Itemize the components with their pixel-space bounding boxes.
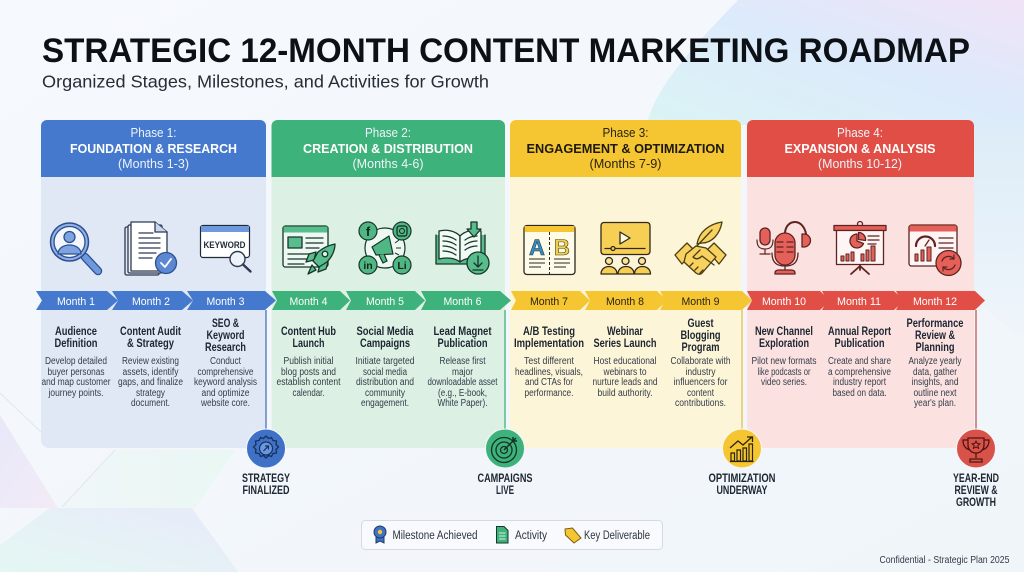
activity: month 7: headlines, visuals, (515, 367, 583, 378)
activity: month 9 (670, 316, 730, 409)
timeline: month chevrons: Month 7 (530, 296, 568, 308)
milestone: year-end review and growth: REVIEW & (954, 485, 998, 497)
panel: phase 1 (41, 120, 266, 448)
milestone: strategy finalized: STRATEGY (242, 473, 290, 485)
timeline: month chevrons: Month 5 (366, 296, 404, 308)
activity: month 8 (592, 324, 658, 399)
panel: phase 2: Phase 2: (365, 125, 411, 140)
activity: month 12 (906, 316, 964, 409)
activity: month 2: Review existing (122, 356, 179, 367)
icon: lead magnet book (436, 222, 489, 274)
icon: A/B test (524, 226, 575, 274)
activity: month 10: New Channel (755, 324, 813, 338)
activity: month 11: a comprehensive (828, 367, 891, 378)
activity: month 8: Webinar (607, 324, 643, 338)
timeline: month chevrons: Month 9 (682, 296, 720, 308)
panel: phase 3: ENGAGEMENT & OPTIMIZATION (526, 141, 724, 156)
activity: month 10: Exploration (759, 336, 809, 350)
activity: month 12: year's plan. (914, 398, 956, 409)
legend: Activity (515, 530, 547, 542)
icon: A/B test: B (554, 235, 570, 260)
milestone: year-end review and growth: YEAR-END (953, 473, 999, 485)
subtitle: Organized Stages, Milestones, and Activities for Growth (42, 72, 489, 92)
activity: month 5 (356, 324, 414, 409)
activity: month 11: industry report (833, 377, 886, 388)
panel: phase 4: Phase 4: (837, 125, 883, 140)
legend: Key Deliverable (584, 530, 650, 542)
timeline: month chevrons: Month 4 (290, 296, 328, 308)
activity: month 5: engagement. (361, 398, 409, 409)
activity: month 1: buyer personas (48, 367, 104, 378)
milestone: campaigns live: CAMPAIGNS (478, 473, 533, 485)
activity: month 7: performance. (524, 388, 574, 399)
timeline: month chevrons: Month 3 (206, 296, 244, 308)
activity: month 8: nurture leads and (592, 377, 658, 388)
activity: month 10: video series. (761, 377, 807, 388)
activity: month 6: Lead Magnet (434, 324, 492, 338)
activity: month 3: SEO & (212, 316, 239, 330)
activity: month 2: assets, identify (122, 367, 178, 378)
panel: phase 1: (Months 1-3) (118, 156, 189, 171)
activity: month 6: Release first (440, 356, 486, 367)
activity: month 9: influencers for (674, 377, 728, 388)
activity: month 6: White Paper). (438, 398, 488, 409)
icon: social media hub (359, 222, 411, 274)
timeline: month chevrons: Month 10 (762, 296, 806, 308)
activity: month 2: strategy (136, 388, 165, 399)
activity: month 8: build authority. (598, 388, 652, 399)
activity: month 12: Review & (915, 328, 955, 342)
milestone: strategy finalized: FINALIZED (242, 485, 290, 497)
icon: guest blogging handshake and feather (675, 222, 726, 274)
activity: month 9: Collaborate with (670, 356, 730, 367)
activity: month 10: like podcasts or (758, 367, 811, 378)
activity: month 7 (514, 324, 584, 399)
activity: month 11: based on data. (832, 388, 886, 399)
icon: podcast microphone (757, 222, 811, 274)
panel: phase 4 (747, 120, 974, 448)
timeline: month chevrons (36, 291, 985, 310)
activity: month 1: Definition (54, 336, 98, 350)
activity: month 2: document. (131, 398, 170, 409)
activity: month 1: Audience (55, 324, 97, 338)
activity: month 5: distribution and (356, 377, 414, 388)
activity: month 12: Planning (916, 340, 954, 354)
activity: month 4: Content Hub (281, 324, 336, 338)
icon: social media hub: in (363, 260, 373, 272)
activity: month 1: and map customer (42, 377, 111, 388)
activity: month 2: gaps, and finalize (118, 377, 183, 388)
activity: month 4: Launch (292, 336, 324, 350)
activity: month 7: A/B Testing (523, 324, 575, 338)
icon: keyword browser (200, 226, 250, 272)
icon: performance dashboard (909, 225, 961, 276)
panel: phase 1: FOUNDATION & RESEARCH (70, 141, 237, 156)
activity: month 12: data, gather (913, 367, 958, 378)
milestone: campaigns live (478, 310, 533, 497)
activity: month 12: Performance (906, 316, 964, 330)
activity: month 4: blog posts and (281, 367, 336, 378)
activity: month 8: webinars to (603, 367, 647, 378)
activity: month 4 (276, 324, 341, 399)
activity: month 11: Create and share (828, 356, 891, 367)
timeline: month chevrons: Month 11 (837, 296, 881, 308)
activity: month 10: Pilot new formats (752, 356, 816, 367)
activity: month 3: comprehensive (198, 367, 254, 378)
panel: phase 2: CREATION & DISTRIBUTION (303, 141, 473, 156)
activity: month 6: downloadable asset (428, 377, 498, 388)
activity: month 9: Blogging (680, 328, 720, 342)
activity: month 5: Initiate targeted (356, 356, 414, 367)
activity: month 7: and CTAs for (525, 377, 574, 388)
activity: month 9: contributions. (675, 398, 726, 409)
activity: month 6: Publication (438, 336, 488, 350)
activity: month 6: (e.g., E-book, (438, 388, 487, 399)
activity: month 12: insights, and (912, 377, 958, 388)
activity: month 3: Conduct (210, 356, 241, 367)
activity: month 4: calendar. (292, 388, 324, 399)
activity: month 11: Annual Report (828, 324, 891, 338)
icon: key deliverable tag (565, 528, 581, 543)
activity: month 7: Test different (524, 356, 574, 367)
activity: month 3: keyword analysis (194, 377, 257, 388)
icon: social media hub: f (366, 224, 371, 239)
activity: month 11: Publication (834, 336, 884, 350)
icon: webinar (601, 222, 650, 274)
activity: month 3: website core. (200, 398, 250, 409)
activity: month 5: community (365, 388, 405, 399)
activity: month 3 (194, 316, 257, 409)
milestone: strategy finalized (242, 310, 290, 497)
activity: month 3: Keyword (206, 328, 244, 342)
legend (362, 520, 662, 550)
milestone: optimization underway (708, 310, 776, 497)
milestone: year-end review and growth: GROWTH (956, 497, 996, 509)
activity: month 5: Social Media (356, 324, 414, 338)
icon: content audit documents (125, 222, 176, 275)
activity: month 9: Guest (688, 316, 714, 330)
icon: milestone ribbon (374, 526, 386, 543)
icon: audience magnifier (50, 223, 98, 271)
panel: phase 3 (510, 120, 741, 448)
activity: month 4: Publish initial (284, 356, 334, 367)
title: STRATEGIC 12-MONTH CONTENT MARKETING ROADMAP (42, 32, 970, 70)
activity: month 1: journey points. (48, 388, 104, 399)
icon: activity document (496, 526, 508, 543)
activity: month 2 (118, 324, 183, 409)
activity: month 6 (428, 324, 498, 409)
icon: content hub browser and rocket (283, 226, 335, 274)
milestone: year-end review and growth (953, 310, 999, 509)
milestone: campaigns live: LIVE (496, 485, 514, 497)
timeline: month chevrons: Month 8 (606, 296, 644, 308)
activity: month 12: outline next (914, 388, 957, 399)
icon: annual report presentation board (834, 222, 886, 274)
activity: month 10 (752, 324, 816, 388)
panel: phase 4: EXPANSION & ANALYSIS (784, 141, 936, 156)
activity: month 9: Program (682, 340, 720, 354)
panel: phase 2 (272, 120, 505, 448)
timeline: month chevrons: Month 1 (57, 296, 95, 308)
activity: month 6: major (452, 367, 474, 378)
activity: month 8: Series Launch (594, 336, 656, 350)
panel: phase 3: Phase 3: (602, 125, 648, 140)
activity: month 3: Research (205, 340, 246, 354)
timeline: month chevrons: Month 6 (444, 296, 482, 308)
activity: month 8: Host educational (594, 356, 656, 367)
milestone: optimization underway: OPTIMIZATION (708, 473, 776, 485)
activity: month 11 (828, 324, 891, 399)
timeline: month chevrons: Month 12 (913, 296, 957, 308)
milestone: optimization underway: UNDERWAY (716, 485, 768, 497)
activity: month 1: Develop detailed (45, 356, 107, 367)
panel: phase 1: Phase 1: (130, 125, 176, 140)
activity: month 9: industry (686, 367, 716, 378)
panel: phase 4: (Months 10-12) (818, 156, 902, 171)
activity: month 7: Implementation (514, 336, 584, 350)
timeline: month chevrons: Month 2 (132, 296, 170, 308)
legend: Milestone Achieved (392, 530, 478, 542)
icon: keyword browser: KEYWORD (204, 240, 246, 251)
icon: social media hub: Li (397, 260, 407, 272)
activity: month 2: Content Audit (120, 324, 181, 338)
activity: month 5: Campaigns (360, 336, 410, 350)
icon: A/B test: A (529, 235, 545, 260)
activity: month 2: & Strategy (127, 336, 174, 350)
activity: month 4: establish content (276, 377, 341, 388)
activity: month 9: content (687, 388, 714, 399)
activity: month 5: social media (363, 367, 407, 378)
activity: month 12: Analyze yearly (908, 356, 962, 367)
panel: phase 2: (Months 4-6) (352, 156, 424, 171)
panel: phase 3: (Months 7-9) (590, 156, 662, 171)
activity: month 1 (42, 324, 111, 399)
activity: month 3: and optimize (202, 388, 250, 399)
